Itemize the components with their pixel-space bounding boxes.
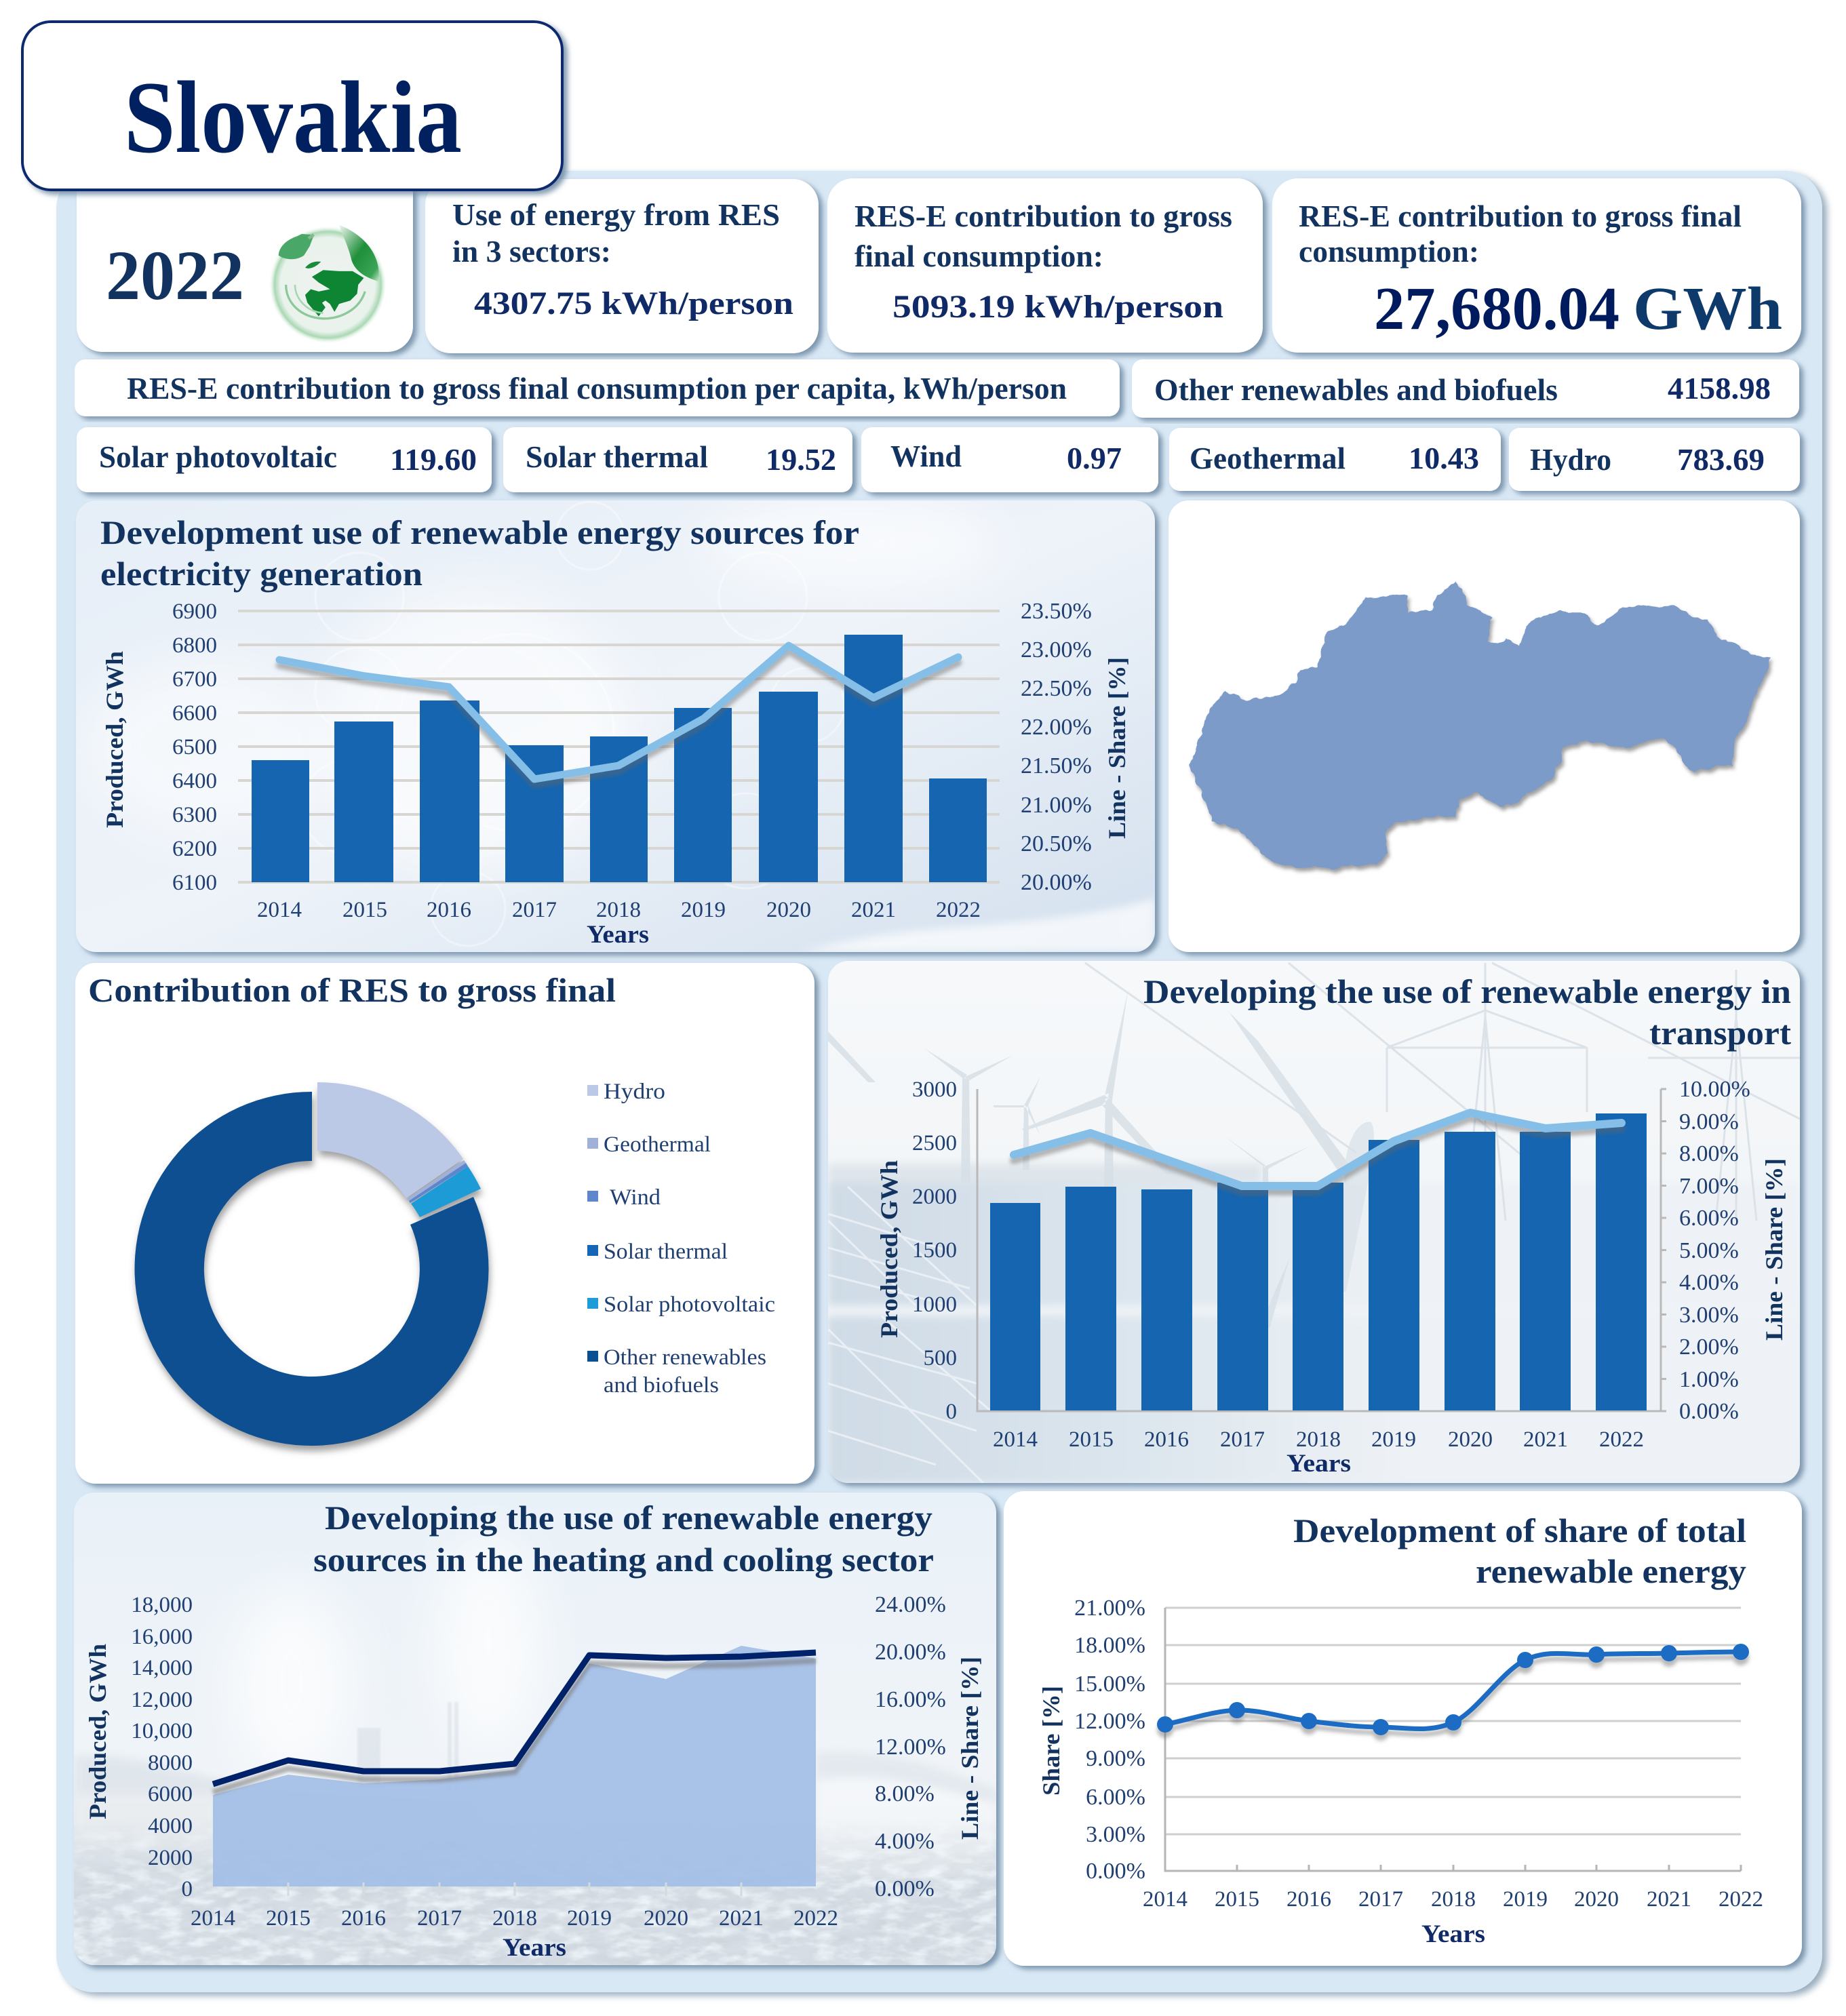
bar chart with share line: 10.00% [1679,1077,1750,1102]
bar chart with share line: 2.00% [1679,1335,1739,1360]
bar chart with share line: 6500 [172,735,217,759]
stat: hydro: Hydro [1530,442,1611,477]
area chart with share line: 2014 [191,1906,235,1931]
bar chart with share line: 22.50% [1021,676,1092,701]
bar chart with share line: 2000 [912,1185,957,1209]
year: 2022 [106,237,244,315]
bar chart with share line: Line - Share [%] [1761,1158,1788,1341]
area chart with share line: 6000 [148,1782,193,1806]
bar chart with share line: 2019 [681,898,726,922]
bar chart with share line: 6200 [172,837,217,861]
line chart: 2017 [1358,1887,1403,1912]
row: per capita heading: RES-E contribution to gross final consumption per capita, kWh/person [127,371,1067,406]
bar chart with share line: Produced, GWh [876,1160,903,1338]
heading: Contribution of RES to gross final [88,971,616,1009]
heading [1143,972,1791,1052]
line chart: 18.00% [1074,1633,1145,1658]
line chart: Years [1421,1920,1485,1948]
bar chart with share line: 6400 [172,769,217,793]
bar chart with share line: 1500 [912,1238,957,1263]
bar chart with share line: 2022 [1599,1427,1644,1452]
bar chart with share line: 2014 [257,898,302,922]
area chart with share line: 0 [182,1877,193,1901]
area chart with share line: 4000 [148,1814,193,1838]
line chart: 15.00% [1074,1672,1145,1697]
text: RES-E contribution: RES-E contribution to gross final [1299,199,1742,233]
area chart with share line: Produced, GWh [84,1644,111,1819]
title: Slovakia: Slovakia [124,60,462,174]
stat: hydro [1509,428,1800,491]
area chart with share line: 4.00% [875,1829,935,1854]
bar chart with share line: 6800 [172,633,217,658]
heading: sources in the heating and cooling sector [313,1541,934,1579]
bar chart with share line: 2017 [1220,1427,1265,1452]
heading: transport [1649,1014,1791,1052]
bar chart with share line: 20.50% [1021,831,1092,856]
bar chart with share line: 21.00% [1021,793,1092,818]
area chart with share line: Years [503,1934,566,1962]
bar chart with share line: 2018 [1296,1427,1341,1452]
stat: solar photovoltaic [77,427,492,492]
bar chart with share line: 9.00% [1679,1109,1739,1134]
bar chart with share line: 3.00% [1679,1303,1739,1328]
area chart with share line: 2000 [148,1846,193,1870]
bar chart with share line: 6700 [172,667,217,692]
line chart [1038,1596,1763,1948]
stat: other renewables and biofuels: Other renewables and biofuels [1154,372,1558,407]
area chart with share line: 2015 [266,1906,311,1931]
heading [313,1499,934,1579]
legend: Geothermal [604,1132,711,1157]
bar chart with share line: 2019 [1371,1427,1416,1452]
bar chart with share line: 2020 [1448,1427,1493,1452]
bar chart with share line: 21.50% [1021,753,1092,778]
bar chart with share line: 1.00% [1679,1367,1739,1392]
area chart with share line: 8000 [148,1751,193,1775]
line chart: 21.00% [1074,1596,1145,1621]
panel: map of Slovakia [1169,500,1800,952]
heading: Developing the use of renewable energy [325,1499,932,1537]
panel: heating and cooling chart [74,1493,996,1965]
area chart with share line [84,1592,983,1962]
legend: Solar thermal [604,1240,728,1264]
legend: Wind [610,1185,661,1210]
panel: transport chart [828,961,1800,1483]
stat: solar thermal [503,427,852,492]
area chart with share line: 8.00% [875,1781,935,1806]
stat: solar thermal: 19.52 [766,442,836,477]
map [1189,582,1771,868]
line chart: 2014 [1143,1887,1187,1912]
line chart: 9.00% [1086,1746,1145,1771]
bar chart with share line: 2014 [993,1427,1038,1452]
heading: electricity generation [100,555,423,593]
stat: other renewables and biofuels [1132,359,1799,418]
stat: geothermal: 10.43 [1409,441,1479,475]
heading [100,513,859,593]
bar chart with share line: 2021 [1523,1427,1568,1452]
stat: hydro: 783.69 [1677,442,1765,477]
area chart with share line: 18,000 [131,1593,193,1617]
title: Slovakia [22,22,562,190]
bar chart with share line: 2017 [512,898,557,922]
bar chart with share line: 2500 [912,1131,957,1155]
stat: solar photovoltaic: 119.60 [390,442,477,477]
area chart with share line: 2021 [719,1906,764,1931]
bar chart with share line: 2015 [342,898,387,922]
area chart with share line: 2018 [492,1906,537,1931]
stat: solar thermal: Solar thermal [526,439,708,474]
bar chart with share line [876,1077,1788,1478]
bar chart with share line: 7.00% [1679,1174,1739,1199]
legend: Other renewables [604,1345,766,1370]
bar chart with share line: 6300 [172,803,217,827]
area chart with share line: 10,000 [131,1719,193,1743]
area chart with share line: 2019 [567,1906,612,1931]
bar chart with share line: 0 [945,1400,957,1424]
line chart: 2018 [1431,1887,1476,1912]
stat: geothermal: Geothermal [1190,441,1346,475]
bar chart with share line: 500 [924,1346,957,1370]
area chart with share line: Line - Share [%] [956,1657,983,1840]
area chart with share line: 12.00% [875,1735,946,1760]
bar chart with share line: Years [587,921,649,949]
bar chart with share line: 6100 [172,871,217,895]
area chart with share line: 12,000 [131,1688,193,1712]
stat: wind: Wind [890,439,962,473]
bar chart with share line: Years [1287,1450,1351,1478]
bar chart with share line: 2020 [766,898,811,922]
line chart: 2019 [1503,1887,1548,1912]
stat: solar photovoltaic: Solar photovoltaic [99,439,337,474]
bar chart with share line: 3000 [912,1078,957,1102]
bar chart with share line: 0.00% [1679,1399,1739,1424]
bar chart with share line: 2016 [427,898,471,922]
area chart with share line: 24.00% [875,1592,946,1617]
bar chart with share line: 23.50% [1021,599,1092,624]
legend: Hydro [604,1080,665,1104]
legend [587,1080,775,1398]
area chart with share line: 20.00% [875,1640,946,1665]
bar chart with share line: 22.00% [1021,715,1092,740]
value: GWh: 27,680.04 [1374,275,1619,342]
stat: wind: 0.97 [1067,441,1122,475]
line chart: 2020 [1574,1887,1619,1912]
panel: RES-E contribution per person: final consumption: [855,239,1103,273]
area chart with share line: 14,000 [131,1656,193,1680]
value: GWh: GWh [1633,275,1782,342]
line chart: 3.00% [1086,1822,1145,1847]
text: use of energy: Use of energy from RES [452,197,780,232]
icon: green globe with leaf and plug [269,225,387,344]
panel: use of energy from RES: in 3 sectors: [452,234,611,269]
heading: Development use of renewable energy sources for [100,513,859,551]
legend: Solar photovoltaic [604,1292,775,1317]
line chart: 12.00% [1074,1709,1145,1734]
bar chart with share line: 2022 [936,898,981,922]
panel: RES-E contribution GWh [1272,178,1801,353]
area chart with share line: 0.00% [875,1876,935,1901]
line chart: 0.00% [1086,1859,1145,1884]
bar chart with share line: 23.00% [1021,637,1092,663]
stat: other renewables and biofuels: 4158.98 [1668,371,1771,406]
panel: total renewable share chart [1004,1491,1802,1966]
heading: renewable energy [1476,1552,1746,1590]
bar chart with share line: Produced, GWh [101,651,128,828]
area chart with share line: 16,000 [131,1625,193,1649]
bar chart with share line: 2016 [1144,1427,1189,1452]
stat: wind [861,427,1158,492]
line chart: 2015 [1215,1887,1259,1912]
bar chart with share line: 1000 [912,1292,957,1317]
heading: Development of share of total [1293,1511,1746,1549]
bar chart with share line [101,599,1131,949]
panel: electricity generation chart [76,495,1155,952]
line chart: 2016 [1287,1887,1331,1912]
line chart: 6.00% [1086,1785,1145,1810]
text: RES-E contribution: RES-E contribution to gross [855,199,1232,233]
panel: contribution of RES donut [75,963,814,1484]
value: kWh per person: 5093.19 kWh/person [892,289,1223,325]
panel: use of energy from RES [425,179,819,353]
line chart: 2021 [1647,1887,1691,1912]
line chart: Share [%] [1038,1686,1065,1796]
bar chart with share line: 20.00% [1021,870,1092,895]
panel: RES-E contribution GWh: consumption: [1299,234,1479,269]
stat: geothermal [1169,428,1501,491]
panel: year and icon [77,163,413,352]
donut chart [134,1082,488,1446]
bar chart with share line: 6.00% [1679,1206,1739,1231]
bar chart with share line: 2018 [596,898,641,922]
bar chart with share line: 8.00% [1679,1141,1739,1166]
area chart with share line: 2016 [341,1906,386,1931]
area chart with share line: 16.00% [875,1687,946,1712]
bar chart with share line: 6600 [172,701,217,726]
line chart: 2022 [1719,1887,1763,1912]
bar chart with share line: 4.00% [1679,1270,1739,1295]
bar chart with share line: Line - Share [%] [1103,657,1131,839]
value: kWh per person: 4307.75 kWh/person [474,285,793,321]
row: per capita heading [75,359,1120,416]
heading: Developing the use of renewable energy in [1143,972,1791,1010]
panel: RES-E contribution per person [827,178,1263,353]
bar chart with share line: 2015 [1069,1427,1114,1452]
value: GWh [1374,275,1782,342]
bar chart with share line: 2021 [851,898,896,922]
bar chart with share line: 5.00% [1679,1238,1739,1263]
bar chart with share line: 6900 [172,599,217,624]
area chart with share line: 2022 [793,1906,838,1931]
area chart with share line: 2017 [417,1906,462,1931]
legend: and biofuels [604,1373,719,1398]
heading [1293,1511,1746,1590]
area chart with share line: 2020 [644,1906,688,1931]
